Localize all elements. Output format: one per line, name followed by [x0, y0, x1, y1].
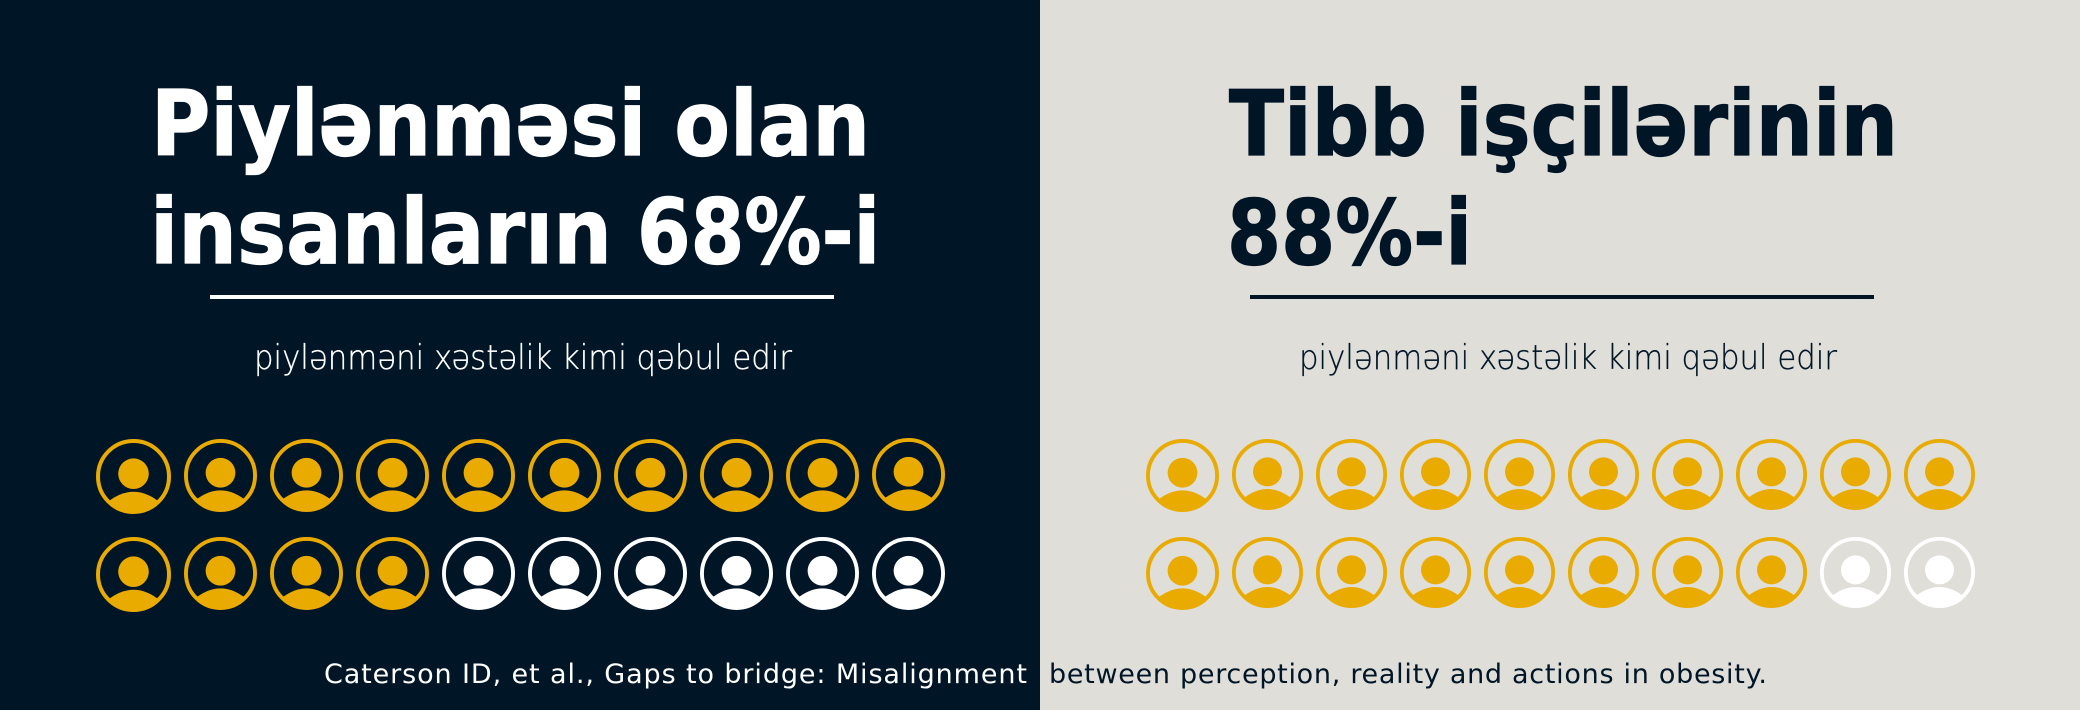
- subtitle: left: piylənməni xəstəlik kimi qəbul edir: [254, 338, 792, 378]
- heading: left: insanların: [150, 180, 612, 285]
- source text: left part: Caterson ID, et al., Gaps to bridge: Misalignment: [324, 659, 1027, 690]
- divider: left: [210, 295, 834, 299]
- icon row: left top: [98, 440, 943, 512]
- icon row: right bottom: [1148, 539, 1973, 608]
- heading: right: [1227, 72, 1898, 286]
- heading: left: Piylənməsi olan: [151, 72, 870, 177]
- icon row: right top: [1148, 441, 1973, 510]
- panel: healthcare workers (right): [1040, 0, 2080, 710]
- panel: general public (left): [0, 0, 1040, 710]
- icon row: left bottom: [98, 539, 943, 610]
- divider: right: [1250, 295, 1874, 299]
- subtitle: right: piylənməni xəstəlik kimi qəbul edir: [1299, 338, 1837, 378]
- heading: right: Tibb işçilərinin: [1229, 72, 1898, 177]
- source text: right part: between perception, reality and actions in obesity.: [1049, 659, 1767, 690]
- heading: right: 88%-i: [1227, 181, 1472, 286]
- heading: left: [150, 72, 880, 285]
- heading: left: 68%-i: [637, 180, 880, 285]
